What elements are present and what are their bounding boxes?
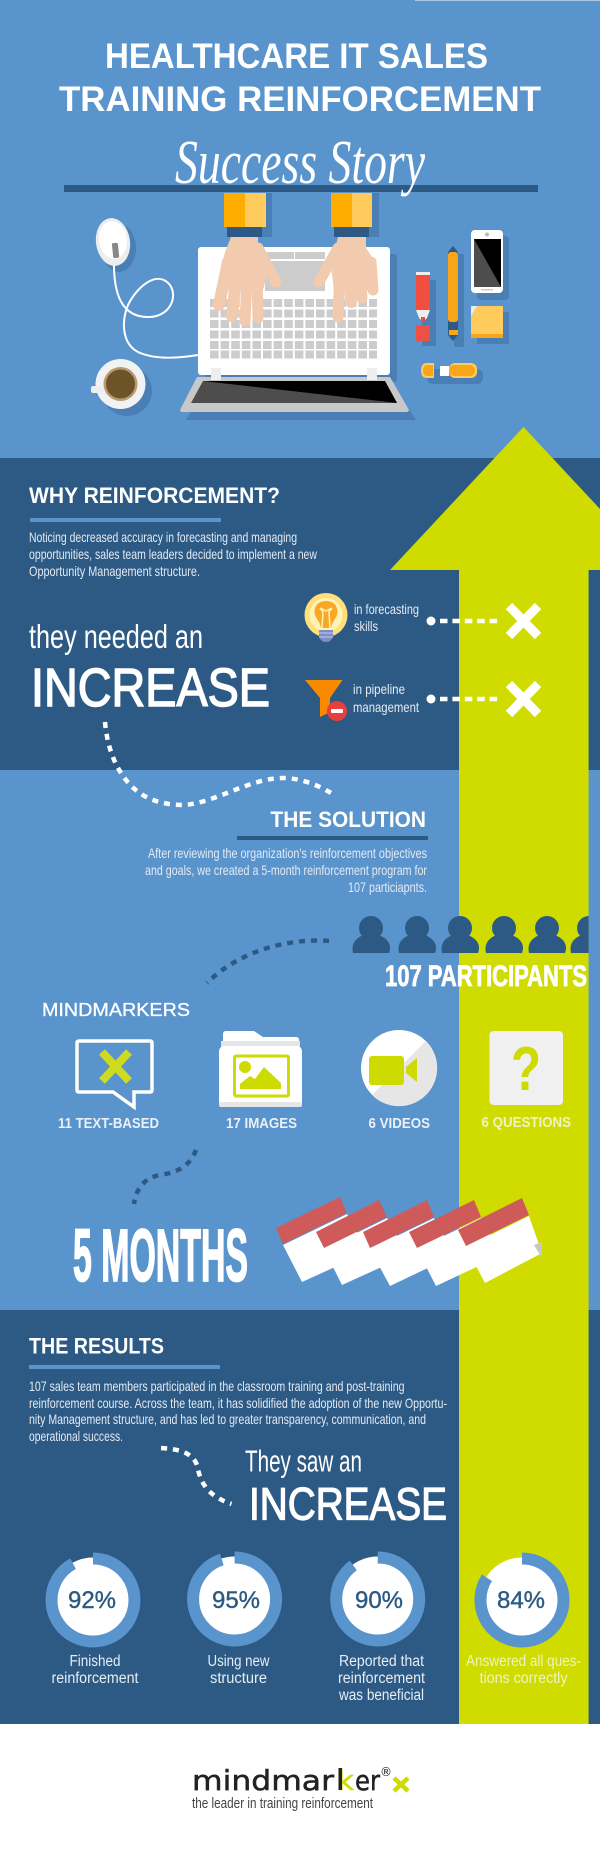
results paragraph: 107 sales team members participated in the classroom training and post-training [29,1378,404,1394]
solution paragraph: After reviewing the organization's reinforcement objectives [148,845,427,861]
label: pipeline management [353,681,419,715]
donut: 92 percent finished: 92% [68,1587,116,1614]
results paragraph: reinforcement course. Across the team, it has solidified the adoption of the new Opportu- [29,1395,447,1411]
logo: mindmarker: mindmar [192,1764,335,1797]
logo: mindmarker: k [337,1764,355,1797]
icon: text-based speech bubble [77,1041,152,1107]
arrow: dashed curve to solution [105,722,331,805]
solution paragraph [145,845,427,895]
callout: they saw an increase: They saw an [245,1444,362,1478]
donut: 90 percent reported beneficial: reinforcement [338,1670,426,1687]
intro paragraph: Opportunity Management structure. [29,563,200,579]
callout: they needed an increase [29,618,270,718]
label: videos: 6 VIDEOS [368,1115,430,1132]
icon: sticky note [471,306,509,344]
donut: 95 percent using new structure [193,1558,276,1687]
arrow: dashed curve to increase [161,1448,232,1504]
label: forecasting skills [354,601,419,634]
label: questions: 6 QUESTIONS [482,1114,571,1131]
icon: right arm and hand [319,193,379,317]
title: HEALTHCARE IT SALES [105,37,488,76]
donut: 84 percent answered correctly: tions correctly [480,1670,568,1687]
heading: THE SOLUTION [270,807,426,832]
icon: left arm and hand [219,193,276,321]
icons: five calendars [276,1197,542,1286]
logo: mindmarker: ® [380,1765,392,1779]
heading: THE RESULTS [29,1334,164,1358]
results paragraph [29,1378,447,1444]
title [59,37,541,119]
icon: funnel with minus [305,680,347,721]
intro paragraph: opportunities, sales team leaders decided to implement a new [29,546,318,562]
donut: 90 percent reported beneficial [336,1558,426,1704]
donut: 90 percent reported beneficial: Reported that [339,1653,425,1670]
label: pipeline management: management [353,699,419,715]
icon: mouse and cord [93,216,198,358]
heading underline [237,836,428,840]
callout: they needed an increase: they needed an [29,618,203,655]
arrow: dashed curve to months [134,1150,196,1204]
donut: 95 percent using new structure: Using new [208,1653,270,1670]
subtitle: success story: Success Story [175,129,425,197]
icon: video camera [361,1030,437,1106]
intro paragraph: Noticing decreased accuracy in forecasting and managing [29,529,297,545]
solution paragraph: 107 particiapnts. [348,879,427,895]
results paragraph: operational success. [29,1428,123,1444]
text: 5 MONTHS [73,1214,248,1297]
icon: marker [416,272,436,346]
label: images: 17 IMAGES [226,1115,297,1132]
icons: participants [352,916,600,953]
donut: 95 percent using new structure: structure [210,1670,267,1687]
panel: the results [29,1334,581,1704]
donut: 84 percent answered correctly [466,1558,581,1687]
intro paragraph [29,529,318,579]
donut: 84 percent answered correctly: Answered all ques- [466,1653,581,1670]
logo: mindmarker [192,1764,408,1812]
heading rule [64,185,538,192]
heading: WHY REINFORCEMENT? [29,483,280,508]
callout: they saw an increase [245,1444,447,1530]
donut: 90 percent reported beneficial: 90% [355,1587,403,1614]
icon: pencil [448,246,464,347]
label: text-based: 11 TEXT-BASED [58,1115,159,1132]
icon: phone [471,230,509,300]
donut: 92 percent finished [52,1558,139,1687]
title: TRAINING REINFORCEMENT [59,80,541,119]
icon: coffee cup [91,359,152,416]
donut: 90 percent reported beneficial: was beneficial [338,1687,424,1704]
label: forecasting skills: in forecasting [354,601,419,617]
label: pipeline management: in pipeline [353,681,405,697]
panel: the solution [145,807,428,895]
donut: 84 percent answered correctly: 84% [497,1587,545,1614]
logo: mindmarker: er [355,1764,380,1797]
panel: why reinforcement [29,483,538,721]
icon: light bulb [304,593,348,642]
icon: usb stick [421,363,483,384]
donut: 92 percent finished: Finished [70,1653,120,1670]
solution paragraph: and goals, we created a 5-month reinforcement program for [145,862,427,878]
heading underline [30,518,221,522]
connector to first x [426,606,538,636]
heading underline [29,1365,220,1369]
icon: images folder [219,1031,302,1107]
icon: question card: ? [511,1035,541,1104]
connector to second x [426,684,538,714]
callout: they needed an increase: INCREASE [31,658,270,718]
donut: 92 percent finished: reinforcement [52,1670,139,1687]
icon: question card [490,1031,563,1105]
logo: mindmarker: the leader in training reinforcement [192,1795,374,1812]
illustration: desk with laptop [91,193,509,420]
big green arrow [390,427,600,1724]
donut: 95 percent using new structure: 95% [212,1587,260,1614]
callout: they saw an increase: INCREASE [249,1478,447,1530]
heading: mindmarkers: MINDMARKERS [42,1000,190,1020]
results paragraph: nity Management structure, and has led to greater transparency, communication, and [29,1411,426,1427]
label: forecasting skills: skills [354,618,378,634]
arrow: dashed curve to mindmarkers [207,941,329,983]
icon: laptop [180,247,416,420]
